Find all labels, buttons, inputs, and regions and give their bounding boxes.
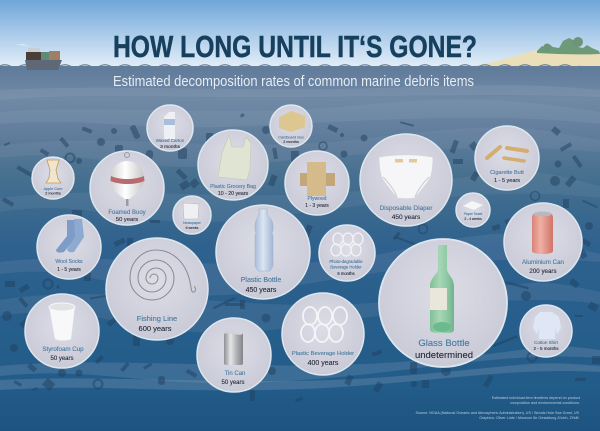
panel: plastic grocery bag: 10 - 20 years <box>218 191 249 197</box>
panel: photo-degradable beverage holder: Photo-degradable <box>329 259 363 264</box>
panel: paper towel <box>456 193 490 227</box>
icon: six-pack rings <box>301 307 347 342</box>
icon: box <box>279 111 305 132</box>
panel: plastic grocery bag <box>198 130 268 200</box>
panel: disposable diaper <box>360 134 452 226</box>
panel: cigarette butt: 1 - 5 years <box>494 178 520 184</box>
icon: tin can <box>224 333 243 365</box>
panel: apple core <box>32 157 74 199</box>
panel: paper towel: Paper Towel <box>464 212 483 216</box>
panel: aluminium can: Aluminium Can <box>522 259 565 266</box>
panel: paper towel: 2 - 4 weeks <box>464 217 482 221</box>
wave crest along the horizon <box>0 65 580 67</box>
panel: glass bottle: undetermined <box>415 350 473 361</box>
panel: styrofoam cup <box>25 294 99 368</box>
panel: waxed carton <box>147 105 193 151</box>
panel: plastic grocery bag: Plastic Grocery Bag <box>210 184 256 190</box>
panel: glass bottle: Glass Bottle <box>418 338 470 349</box>
icon: socks <box>56 220 76 253</box>
panel: wool socks: 1 - 5 years <box>57 267 81 273</box>
footnote <box>416 396 580 420</box>
icon: diaper <box>379 155 433 199</box>
footnote: Graphics: Oliver Lüde / Museum für Gestaltung Zürich, ZHdK <box>479 416 580 420</box>
panel: cotton shirt: Cotton Shirt <box>534 340 559 345</box>
panel: styrofoam cup: 50 years <box>50 356 74 362</box>
icon: apple core <box>46 160 61 183</box>
panel: plastic bottle: 450 years <box>246 287 277 294</box>
icon: cigarettes <box>487 147 500 158</box>
panel: cardboard box <box>270 105 312 147</box>
icon: fishing line spiral and hook <box>130 250 196 300</box>
panel: cotton shirt <box>520 305 572 357</box>
panel: plastic beverage holder <box>282 293 364 375</box>
panel: plastic beverage holder: Plastic Beverage Holder <box>292 351 354 357</box>
panel: plywood: 1 - 3 years <box>305 203 329 209</box>
icon: bag <box>218 135 251 180</box>
panel: plastic bottle <box>216 205 310 299</box>
panel: photo-degradable beverage holder <box>319 225 375 281</box>
panel: wool socks <box>37 215 101 279</box>
panel: wool socks: Wool Socks <box>55 259 83 265</box>
title: HOW LONG UNTIL IT‘S GONE? <box>113 29 477 64</box>
panel: waxed carton: 3 months <box>160 144 180 150</box>
panel: newspaper <box>173 196 211 234</box>
icon: carton <box>164 112 175 139</box>
panel: styrofoam cup: Styrofoam Cup <box>42 346 84 353</box>
panel: aluminium can: 200 years <box>529 268 557 275</box>
icon: shirt <box>533 312 561 339</box>
panel: newspaper: Newspaper <box>183 221 202 225</box>
panel: cigarette butt <box>475 126 539 190</box>
panel: photo-degradable beverage holder: 6 months <box>337 271 355 276</box>
panel: glass bottle <box>379 239 507 367</box>
panel: plastic bottle: Plastic Bottle <box>241 277 281 284</box>
floating debris silhouettes <box>2 113 600 402</box>
panel: cotton shirt: 2 - 5 months <box>533 346 559 351</box>
panel: cardboard box: 2 months <box>283 140 299 144</box>
panel: foamed buoy <box>90 151 164 225</box>
sky background <box>0 0 600 67</box>
icon: container ship <box>15 44 62 70</box>
panel: plywood: Plywood <box>308 196 327 202</box>
panel: apple core: 2 months <box>45 192 61 196</box>
panel: tin can <box>197 318 271 392</box>
icon: six-pack rings <box>331 233 363 256</box>
panel: foamed buoy: 50 years <box>116 217 138 223</box>
panel: disposable diaper: 450 years <box>392 214 421 221</box>
panel: photo-degradable beverage holder: Beverage Holder <box>330 264 362 270</box>
footnote: Estimated individual item timelines depend on product <box>492 396 580 400</box>
panel: foamed buoy: Foamed Buoy <box>108 210 146 216</box>
icon: bottle <box>255 209 273 271</box>
panel: fishing line <box>106 238 208 340</box>
panel: cigarette butt: Cigarette Butt <box>490 170 524 176</box>
panel: fishing line: Fishing Line <box>137 314 177 323</box>
panel: plywood <box>285 151 349 215</box>
footnote: Source: NOAA (National Oceanic and Atmospheric Administration), US / Woods Hole Sea Grant, US <box>416 411 580 415</box>
panel: newspaper: 6 weeks <box>186 226 199 230</box>
panel: tin can: Tin Can <box>225 371 245 377</box>
icon: newspaper <box>183 203 199 219</box>
panel: plastic beverage holder: 400 years <box>308 360 339 367</box>
icon: cup <box>49 306 75 340</box>
icon: glass bottle <box>430 245 454 333</box>
panel: fishing line: 600 years <box>139 324 172 333</box>
panel: disposable diaper: Disposable Diaper <box>379 205 433 212</box>
panel: waxed carton: Waxed Carton <box>156 138 185 143</box>
panel: aluminium can <box>504 203 582 281</box>
wave bands <box>0 85 600 390</box>
icon: can <box>532 214 553 254</box>
footnote: composition and environmental conditions. <box>510 401 580 405</box>
icon: towel <box>463 201 483 210</box>
panel: cardboard box: Cardboard Box <box>278 136 304 140</box>
panel: apple core: Apple Core <box>44 187 62 191</box>
island on the horizon <box>472 37 600 67</box>
panel: tin can: 50 years <box>221 380 245 386</box>
subtitle: Estimated decomposition rates of common marine debris items <box>113 74 474 90</box>
icon: plywood sheets <box>300 173 335 186</box>
icon: buoy <box>110 161 144 199</box>
